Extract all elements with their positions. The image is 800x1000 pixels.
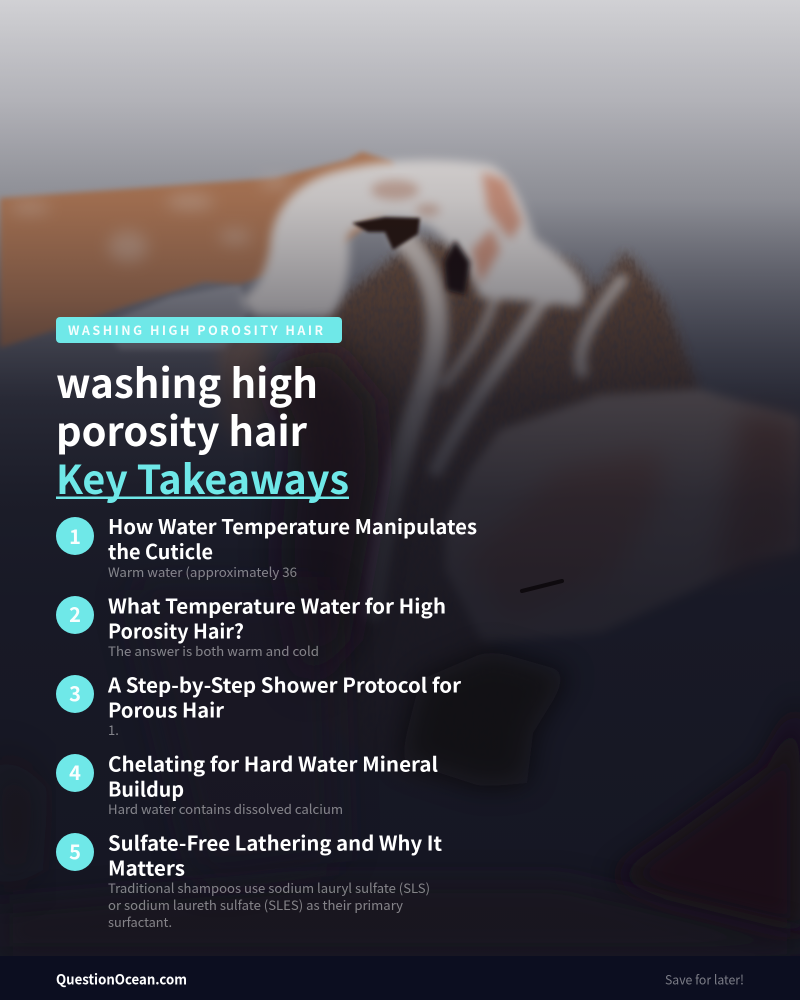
heading 5 [108,828,443,882]
shadow: hair under hand [400,650,570,787]
number badge 5: 5 [69,836,81,865]
number badge 2 [56,596,94,634]
footer bar [0,956,800,1000]
heading 1: How Water Temperature Manipulates [108,511,477,540]
number badge 3 [56,675,94,713]
shadow: crease on hand [522,581,562,591]
shadow: left edge [0,750,35,890]
shadow: lower band [0,880,800,956]
number badge 4: 4 [69,757,81,786]
number badge 1 [56,517,94,555]
heading 2: Porosity Hair? [108,616,244,644]
number badge 4 [56,754,94,792]
photo: arm [0,152,400,348]
description 4: Hard water contains dissolved calcium [108,799,343,818]
photo: finger shadow [444,240,470,295]
takeaway 5 [56,828,443,931]
title: Key Takeaways [56,448,349,506]
photo: foam strands through hair [372,238,622,610]
photo: hand at right [445,390,800,643]
footer site name: QuestionOcean.com [56,970,187,990]
heading 2: What Temperature Water for High [108,590,446,620]
photo: skin strip below arm [218,330,272,450]
category badge [56,317,342,343]
category badge: WASHING HIGH POROSITY HAIR [68,320,323,339]
description 5 [108,878,430,931]
heading 1 [108,511,477,565]
description 5: surfactant. [108,912,172,931]
heading 4: Buildup [108,774,184,802]
photo: forearm at right [715,410,800,585]
heading 4: Chelating for Hard Water Mineral [108,748,438,778]
description 5: Traditional shampoos use sodium lauryl sulfate (SLS) [108,878,430,897]
takeaway 3 [56,670,461,739]
title [56,352,349,506]
photo: skin speckles on foam [371,180,440,216]
heading 5: Sulfate-Free Lathering and Why It [108,828,443,856]
description 2: The answer is both warm and cold [108,641,319,660]
photo: hair mass [270,240,699,790]
number badge 1: 1 [69,521,81,550]
shadow: centre column tint [130,590,340,880]
heading 3 [107,670,461,724]
title: porosity hair [56,400,308,458]
number badge 5 [56,833,94,871]
shadows over the overlay [0,345,800,956]
takeaway 2 [56,590,446,660]
takeaway 1 [56,511,477,581]
heading 2 [108,590,446,644]
number badge 2: 2 [69,599,81,628]
heading 3: Porous Hair [108,694,224,724]
photo: skin accent on fingers [472,172,522,284]
number badge 3: 3 [69,678,81,707]
heading 5: Matters [108,852,185,882]
photo: sleeve highlight below arm [100,284,250,350]
heading 1: the Cuticle [108,536,213,565]
description 5: or sodium laureth sulfate (SLES) as their primary [108,895,403,914]
takeaway 4 [56,748,438,818]
shadow: lower right arm [613,700,800,933]
photo: gap between fingers [352,217,420,250]
photo: foam patches on arm [10,176,291,263]
description 3: 1. [108,720,119,739]
photo: foam on front hand [240,160,585,318]
heading 3: A Step-by-Step Shower Protocol for [107,670,461,698]
heading 4 [108,748,438,802]
photo: orange skin patches [465,450,660,620]
shadow: dark hair at left [262,345,380,690]
footer save note: Save for later! [665,970,744,988]
title: washing high [56,352,318,410]
description 1: Warm water (approximately 36 [108,562,297,581]
